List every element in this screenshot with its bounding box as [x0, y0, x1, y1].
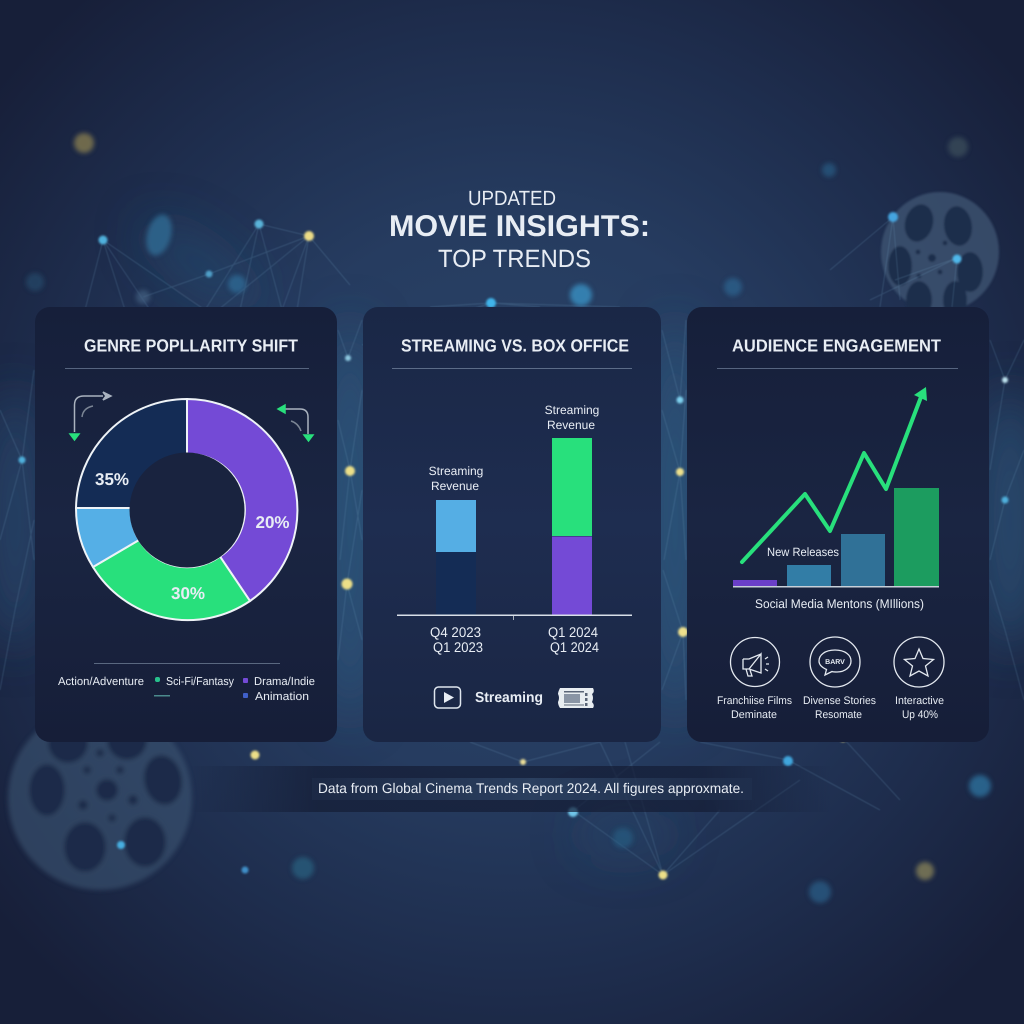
bar chart: Q1 2023 [433, 639, 483, 655]
percent labels: 30% [171, 584, 205, 603]
bar chart: Streaming [429, 464, 483, 478]
blurred network nodes [26, 133, 991, 903]
sharp network nodes [18, 212, 1008, 880]
bar and line chart [733, 387, 939, 611]
captions: Divense Stories [803, 695, 876, 707]
donut chart [76, 399, 297, 620]
footer note: Data from Global Cinema Trends Report 2024. All figures approxmate. [318, 780, 744, 796]
panel: audience engagement [687, 307, 989, 742]
background glow patches [0, 207, 1024, 859]
legend [58, 676, 315, 703]
bar chart: Q4 2023 [430, 624, 481, 640]
captions: Resomate [815, 709, 862, 721]
legend: Drama/Indie [254, 676, 315, 688]
panel: genre popularity shift [35, 307, 337, 742]
title [389, 187, 650, 273]
captions: Franchiise Films [717, 695, 792, 707]
legend: Sci-Fi/Fantasy [166, 676, 234, 688]
film reel bottom left [8, 706, 192, 890]
bar chart: Q1 2024 [550, 639, 599, 655]
captions: Interactive [895, 695, 944, 707]
bar chart [397, 403, 632, 655]
captions [717, 695, 944, 721]
icon: speech bubble [810, 637, 860, 687]
bar chart: Revenue [547, 418, 595, 432]
legend: Animation [255, 691, 309, 703]
title: UPDATED [468, 187, 556, 210]
arrows right [278, 405, 313, 441]
heading: genre popularity: GENRE POPLLARITY SHIFT [84, 336, 298, 356]
bar chart: Q1 2024 [548, 624, 598, 640]
bar chart: Streaming [545, 403, 599, 417]
title: MOVIE INSIGHTS: [389, 210, 650, 243]
legend: Action/Adventure [58, 676, 144, 688]
film reel top right [881, 192, 999, 319]
network lines [0, 217, 1024, 875]
title: TOP TRENDS [438, 245, 591, 273]
icon: megaphone [730, 638, 780, 686]
captions: Deminate [731, 709, 777, 721]
heading: streaming: STREAMING VS. BOX OFFICE [401, 336, 629, 356]
captions: Up 40% [902, 709, 938, 721]
icon: ticket [558, 688, 594, 708]
bar and line chart: New Releases [767, 545, 839, 559]
bar chart: Revenue [431, 479, 479, 493]
percent labels [95, 470, 290, 603]
icon: play button [434, 687, 460, 708]
arrows left [70, 392, 111, 440]
icon: speech bubble: BARV [825, 659, 845, 666]
bar and line chart: Social Media Mentons (MIllions) [755, 597, 924, 611]
percent labels: 35% [95, 470, 129, 489]
icon: star [894, 637, 944, 687]
panel: streaming vs box office [363, 307, 661, 742]
footer note [190, 766, 830, 812]
heading: audience: AUDIENCE ENGAGEMENT [732, 336, 941, 356]
streaming label: Streaming [475, 690, 543, 706]
percent labels: 20% [255, 513, 290, 532]
